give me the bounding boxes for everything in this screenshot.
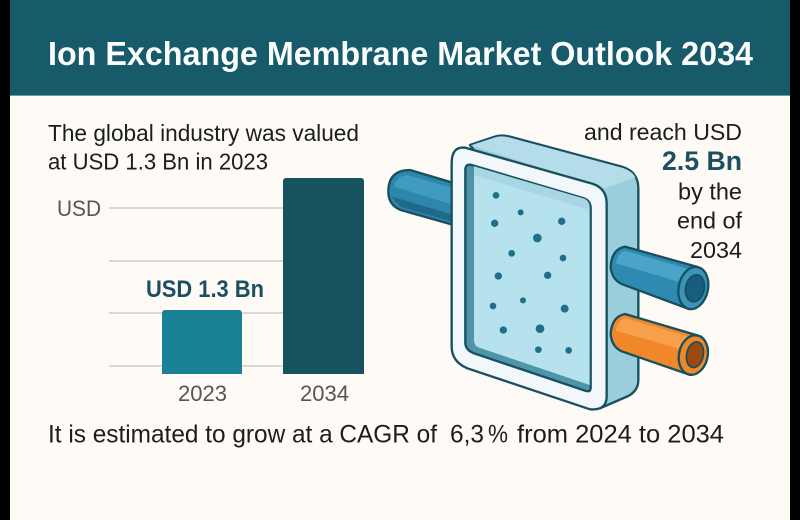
text block: forecast value: 2.5 Bn [662,146,742,176]
text block: forecast value: by the [678,178,742,204]
membrane glass [474,166,590,385]
text block: industry value: The global industry was valued [48,120,359,146]
bar chart [57,178,364,406]
bar value label: USD 1.3 Bn [146,276,264,303]
text block: forecast value: end of [677,208,742,234]
year labels [178,381,349,406]
ion particles [490,192,572,354]
right outlet pipe: orange [611,314,712,378]
text block: CAGR statement [48,420,724,448]
axis label: USD [57,196,101,221]
membrane frame [452,148,607,409]
text block: CAGR statement: % [488,420,508,448]
membrane recess [465,165,591,391]
icon: membrane module [388,135,712,409]
bar: 2023 [162,310,242,374]
text block: forecast value: 2034 [690,237,742,263]
bar: 2034 [283,178,364,374]
right outlet pipe: blue [611,247,712,312]
module housing [470,135,638,408]
text block: forecast value [584,119,742,263]
header banner [10,0,790,95]
title: Ion Exchange Membrane Market Outlook 2034 [48,35,754,72]
text block: CAGR statement: 6,3 [450,420,484,448]
text block: industry value: at USD 1.3 Bn in 2023 [48,148,268,174]
text block: CAGR statement: from 2024 to 2034 [517,420,724,448]
text block: industry value [48,120,359,174]
left inlet pipe [388,170,455,225]
year labels: 2023 [178,381,227,406]
year labels: 2034 [300,381,349,406]
text block: forecast value: and reach USD [584,119,742,145]
text block: CAGR statement: It is estimated to grow at a CAGR of [48,420,437,448]
